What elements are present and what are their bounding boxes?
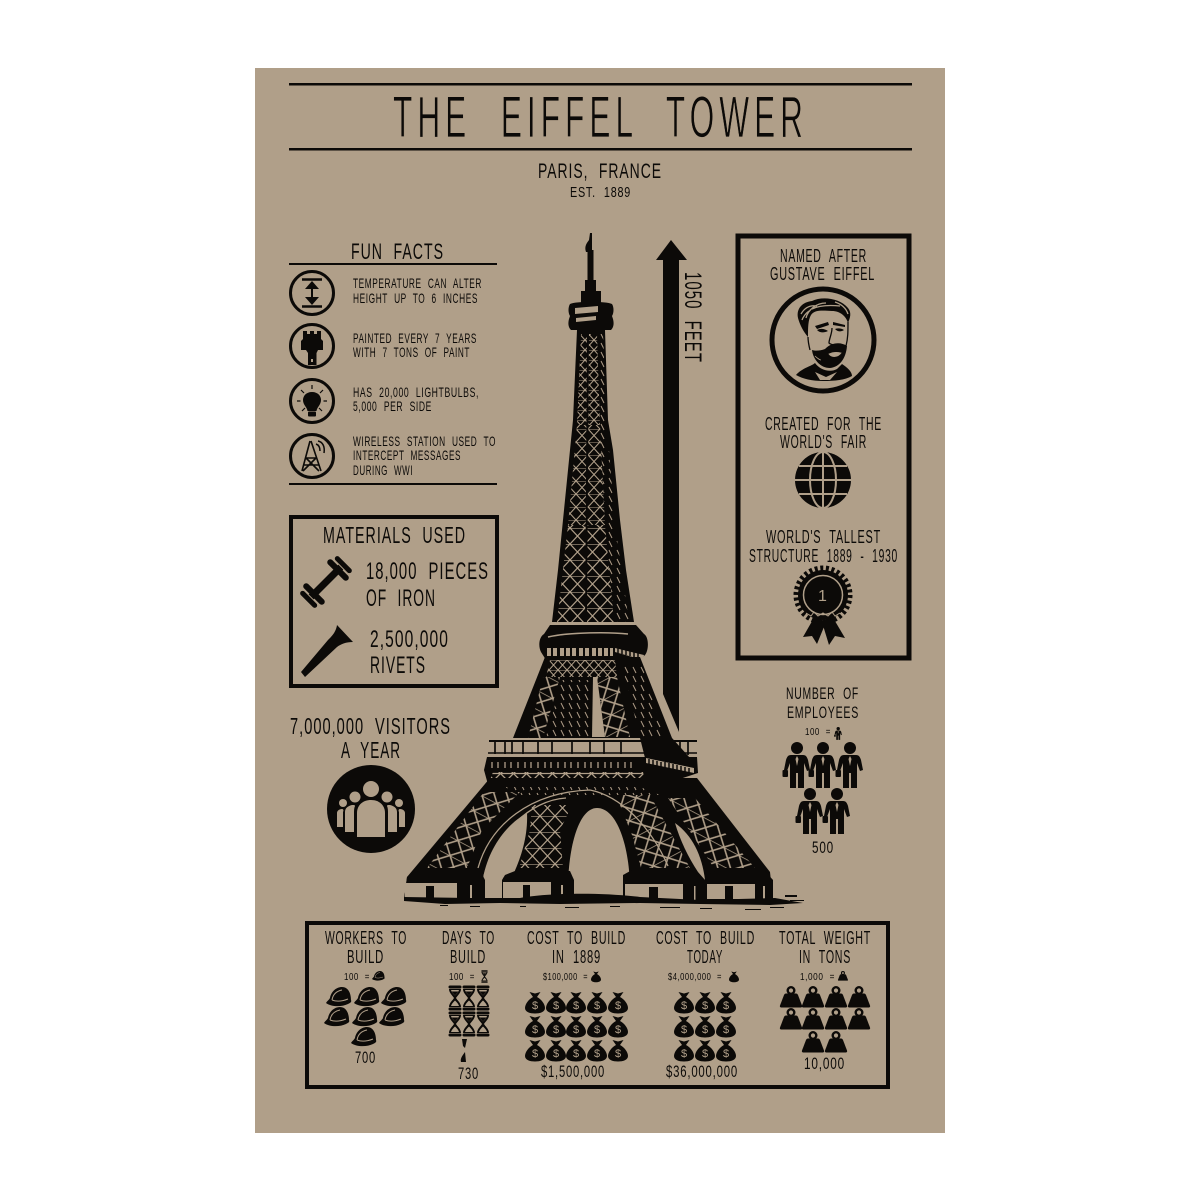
text: named after: GUSTAVE EIFFEL xyxy=(770,264,875,284)
base legs xyxy=(404,778,773,900)
text: rivets xyxy=(370,626,449,679)
illustration: Eiffel Tower xyxy=(404,233,804,910)
column: days xyxy=(442,928,495,1083)
column: cost 1889: $100,000 = xyxy=(543,972,588,983)
arch openings xyxy=(483,808,705,898)
column: workers: 100 = xyxy=(344,972,370,983)
icon: portrait of Gustave Eiffel xyxy=(772,289,874,391)
leg foundations xyxy=(404,870,773,902)
column: cost 1889: IN 1889 xyxy=(552,947,601,967)
fact: painting: PAINTED EVERY 7 YEARS xyxy=(353,330,477,346)
column: weight: TOTAL WEIGHT xyxy=(779,928,871,948)
heading: employees: NUMBER OF xyxy=(786,684,859,703)
icon: group of visitors xyxy=(327,765,415,853)
text: 1050 feet: 1050 FEET xyxy=(679,272,706,363)
column: days: BUILD xyxy=(450,947,486,967)
column: cost today: $$$ xyxy=(681,1048,729,1060)
upper tower section xyxy=(552,330,634,622)
fact: wireless station xyxy=(353,433,496,478)
column: workers: 700 xyxy=(355,1048,376,1067)
fact: temperature xyxy=(353,275,482,306)
ground xyxy=(404,894,804,910)
icon: radio tower xyxy=(290,434,334,478)
text: iron pieces: OF IRON xyxy=(366,585,436,612)
arrow: height xyxy=(656,240,687,732)
column: cost 1889: COST TO BUILD xyxy=(527,928,626,948)
heading: materials used: MATERIALS USED xyxy=(323,522,466,548)
fact: lightbulbs: HAS 20,000 LIGHTBULBS, xyxy=(353,384,479,400)
title block: THE EIFFEL TOWER xyxy=(393,85,808,150)
icon: height arrow xyxy=(290,272,334,314)
column: cost 1889: $1,500,000 xyxy=(541,1062,605,1081)
column: cost today: COST TO BUILD xyxy=(656,928,755,948)
spire tip and antenna xyxy=(581,233,601,304)
fact: wireless station: WIRELESS STATION USED TO xyxy=(353,433,496,449)
text: world's fair xyxy=(765,414,882,452)
heading: employees: EMPLOYEES xyxy=(787,703,859,722)
second platform railing xyxy=(488,738,697,758)
column: cost 1889: $$$$$ xyxy=(532,1048,621,1060)
column: cost 1889: $$$$$ xyxy=(532,1000,621,1012)
column: cost today: $36,000,000 xyxy=(666,1062,738,1081)
subtitle: location and date xyxy=(538,160,662,201)
subtitle: location and date: EST. 1889 xyxy=(570,184,631,201)
icon: dumbbell xyxy=(297,553,355,611)
lower tower section xyxy=(513,657,672,738)
column: workers xyxy=(324,928,407,1067)
column: weight: 10,000 xyxy=(804,1054,845,1073)
text: world's tallest: STRUCTURE 1889 - 1930 xyxy=(749,546,898,566)
fact: wireless station: DURING WWI xyxy=(353,462,413,478)
fact: painting xyxy=(353,330,477,360)
column: cost today: $$$ xyxy=(681,1024,729,1036)
text: visitors xyxy=(290,713,451,763)
icon: light bulb xyxy=(290,380,334,422)
poster background xyxy=(255,68,945,1133)
heading: fun facts: FUN FACTS xyxy=(351,239,444,264)
column: days: 100 = xyxy=(449,972,475,983)
column: cost 1889: $$$$$ xyxy=(532,1024,621,1036)
column: days: 730 xyxy=(458,1064,479,1083)
column: weight: IN TONS xyxy=(799,947,851,967)
pictogram: employees xyxy=(782,742,863,834)
column: workers: BUILD xyxy=(347,947,384,967)
column: cost today: $$$ xyxy=(681,1000,729,1012)
top platform xyxy=(568,302,614,330)
text: iron pieces xyxy=(366,558,489,612)
column: cost today xyxy=(656,928,755,1081)
text: rivets: 2,500,000 xyxy=(370,626,449,653)
panel: number of employees xyxy=(782,684,863,857)
icon: first place ribbon xyxy=(796,568,850,645)
column: cost 1889 xyxy=(525,928,628,1081)
icon: rivet xyxy=(301,625,353,677)
fact: lightbulbs xyxy=(353,384,479,414)
icon: first place ribbon: 1 xyxy=(818,588,828,605)
fact: painting: WITH 7 TONS OF PAINT xyxy=(353,344,470,360)
text: rivets: RIVETS xyxy=(370,652,426,679)
text: named after xyxy=(770,246,875,284)
panel: materials used xyxy=(291,517,497,686)
text: visitors: 7,000,000 VISITORS xyxy=(290,713,451,739)
fact: wireless station: INTERCEPT MESSAGES xyxy=(353,447,461,463)
text: world's tallest xyxy=(749,527,898,566)
text: visitors: A YEAR xyxy=(341,737,401,763)
fact: temperature: HEIGHT UP TO 6 INCHES xyxy=(353,290,478,306)
panel: facts box xyxy=(738,236,909,658)
legend: one person equals 100: 100 = xyxy=(805,727,831,738)
icon: paint brush xyxy=(290,324,334,368)
heading: employees xyxy=(786,684,859,722)
panel: construction statistics xyxy=(307,923,888,1087)
fact: lightbulbs: 5,000 PER SIDE xyxy=(353,398,432,414)
subtitle: location and date: PARIS, FRANCE xyxy=(538,160,662,183)
fact: temperature: TEMPERATURE CAN ALTER xyxy=(353,275,482,291)
icon: globe xyxy=(795,452,851,508)
second platform deck xyxy=(484,754,698,792)
column: weight xyxy=(779,928,871,1073)
text: world's tallest: WORLD'S TALLEST xyxy=(766,527,881,547)
value: 500 employees: 500 xyxy=(812,838,834,857)
column: days: DAYS TO xyxy=(442,928,495,948)
text: iron pieces: 18,000 PIECES xyxy=(366,558,489,585)
text: named after: NAMED AFTER xyxy=(780,246,867,266)
text: world's fair: WORLD'S FAIR xyxy=(780,432,867,452)
column: cost today: TODAY xyxy=(687,947,723,967)
column: weight: 1,000 = xyxy=(800,972,835,983)
column: workers: WORKERS TO xyxy=(325,928,407,948)
column: cost today: $4,000,000 = xyxy=(668,972,722,983)
first platform xyxy=(539,625,648,660)
text: world's fair: CREATED FOR THE xyxy=(765,414,882,434)
panel: fun facts xyxy=(289,239,497,485)
